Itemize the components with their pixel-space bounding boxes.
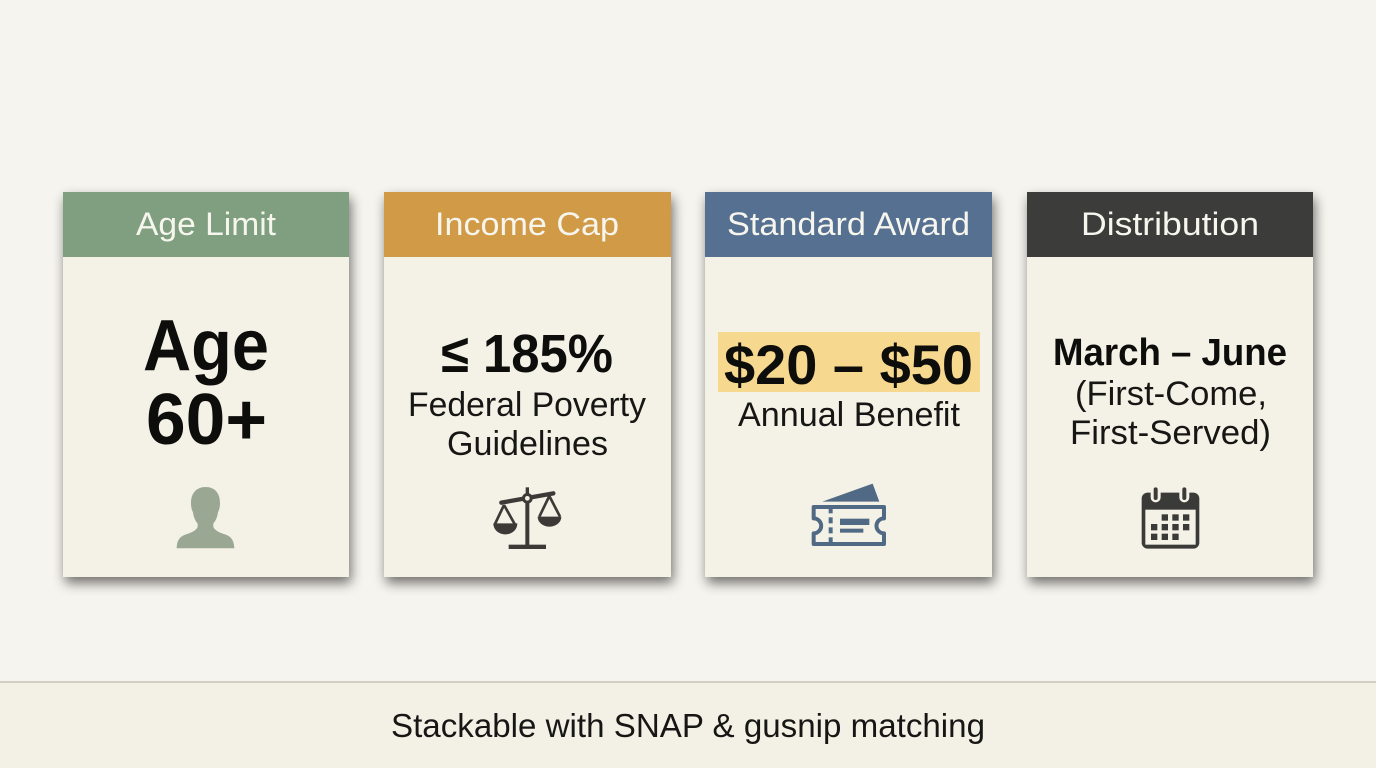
highlighted value: award range: $20 – $50 [724, 333, 973, 396]
icon: ticket [814, 484, 884, 544]
header: income cap [384, 192, 671, 257]
value: march to june: March – June [1053, 332, 1287, 374]
icon: person [177, 487, 234, 548]
icon: calendar [1142, 485, 1199, 549]
header: distribution [1027, 192, 1313, 257]
text: first-come first-served: (First-Come, [1075, 375, 1267, 413]
text: annual benefit: Annual Benefit [738, 396, 961, 434]
header: standard award: Standard Award [727, 206, 970, 242]
header: age limit [63, 192, 349, 257]
value: age 60+: 60+ [146, 380, 267, 460]
text: federal poverty guidelines [408, 386, 646, 463]
value: age 60+ [143, 306, 269, 460]
text: federal poverty guidelines: Guidelines [447, 425, 608, 463]
icon: scales [493, 487, 561, 549]
header: standard award [705, 192, 992, 257]
panel: age limit [63, 192, 349, 577]
panel: income cap [384, 192, 671, 577]
panel: distribution [1027, 192, 1313, 577]
footer bar [0, 682, 1376, 768]
footer text: Stackable with SNAP & gusnip matching [391, 707, 985, 744]
header: distribution: Distribution [1081, 206, 1259, 242]
text: federal poverty guidelines: Federal Poverty [408, 386, 646, 424]
text: first-come first-served [1070, 375, 1271, 452]
panel: standard award [705, 192, 992, 577]
header: income cap: Income Cap [435, 206, 619, 242]
value: age 60+: Age [143, 306, 269, 386]
value: 185 percent: ≤ 185% [441, 324, 613, 384]
text: first-come first-served: First-Served) [1070, 414, 1271, 452]
header: age limit: Age Limit [136, 206, 276, 242]
